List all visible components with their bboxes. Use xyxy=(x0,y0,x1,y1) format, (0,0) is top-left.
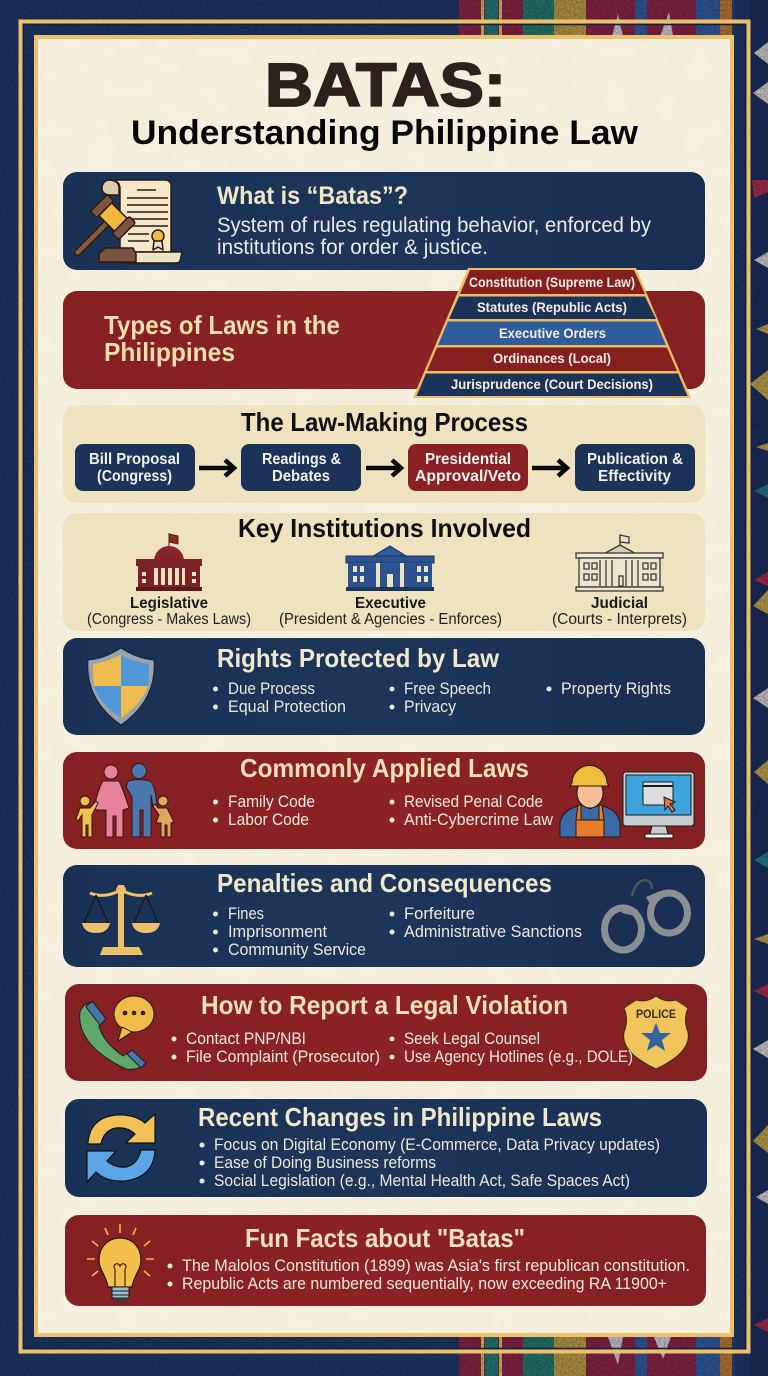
icon: handcuffs xyxy=(604,880,688,950)
pyramid chart: Executive Orders xyxy=(499,325,606,341)
pyramid chart: Jurisprudence (Court Decisions) xyxy=(451,376,653,392)
pyramid chart: Ordinances (Local) xyxy=(493,350,611,366)
icon: police badge: POLICE xyxy=(636,1009,676,1021)
list: Revised Penal Code xyxy=(404,793,543,811)
list: The Malolos Constitution (1899) was Asia's first republican constitution. xyxy=(182,1257,690,1275)
heading xyxy=(104,310,340,367)
arrow xyxy=(199,460,234,476)
heading: What is “Batas”? xyxy=(217,182,408,210)
step: presidential approval xyxy=(408,444,528,491)
list: Free Speech xyxy=(404,680,491,698)
list xyxy=(200,1136,660,1190)
label: executive: (President & Agencies - Enforces) xyxy=(279,611,502,628)
list xyxy=(213,905,582,959)
heading: Commonly Applied Laws xyxy=(240,753,529,783)
heading: Recent Changes in Philippine Laws xyxy=(198,1102,602,1132)
list: Imprisonment xyxy=(228,923,327,941)
heading: The Law-Making Process xyxy=(241,407,528,437)
step: readings and debates: Debates xyxy=(272,468,330,485)
heading: Key Institutions Involved xyxy=(238,513,531,543)
icon: family xyxy=(76,764,174,837)
list: File Complaint (Prosecutor) xyxy=(186,1048,380,1066)
icon: computer xyxy=(623,772,694,838)
description: System of rules regulating behavior, enforced by xyxy=(217,213,651,237)
icon: shield xyxy=(88,648,154,725)
heading: Penalties and Consequences xyxy=(217,868,552,898)
panel: recent changes xyxy=(65,1099,707,1197)
step: bill proposal: (Congress) xyxy=(97,468,172,485)
step: bill proposal xyxy=(75,444,195,491)
list: Seek Legal Counsel xyxy=(404,1030,540,1048)
list: Family Code xyxy=(228,793,315,811)
title xyxy=(131,51,639,152)
panel: how to report xyxy=(65,984,707,1081)
pyramid chart xyxy=(413,268,691,398)
description xyxy=(217,213,651,259)
step: readings and debates xyxy=(241,444,361,491)
list: Property Rights xyxy=(561,680,671,698)
pyramid chart: Statutes (Republic Acts) xyxy=(477,299,627,315)
list: Privacy xyxy=(404,698,457,716)
description: institutions for order & justice. xyxy=(217,235,488,259)
list: Anti-Cybercrime Law xyxy=(404,811,553,829)
list: Republic Acts are numbered sequentially, now exceeding RA 11900+ xyxy=(182,1275,667,1293)
list: Ease of Doing Business reforms xyxy=(214,1154,436,1172)
panel: key institutions xyxy=(63,513,705,631)
heading: Philippines xyxy=(104,337,235,367)
panel: types of laws xyxy=(63,268,705,398)
panel: law-making process xyxy=(63,405,705,503)
list xyxy=(213,793,553,829)
step: publication: Publication & xyxy=(587,451,683,468)
list xyxy=(213,680,671,716)
icon: light bulb xyxy=(87,1224,154,1302)
list: Equal Protection xyxy=(228,698,346,716)
panel: rights protected xyxy=(63,638,705,735)
list: Community Service xyxy=(228,941,366,959)
icon: legislative building xyxy=(136,533,202,591)
list xyxy=(168,1257,690,1293)
list: Due Process xyxy=(228,680,315,698)
icon: executive building xyxy=(346,546,434,591)
panel: penalties xyxy=(63,865,705,967)
step: presidential approval: Approval/Veto xyxy=(415,468,521,485)
list: Forfeiture xyxy=(404,905,475,923)
pyramid chart: Constitution (Supreme Law) xyxy=(469,274,635,290)
step: publication xyxy=(575,444,695,491)
step: publication: Effectivity xyxy=(598,468,671,485)
label: judicial xyxy=(552,595,687,628)
icon: refresh arrows xyxy=(87,1114,155,1182)
label: legislative: (Congress - Makes Laws) xyxy=(87,611,251,628)
label: legislative: Legislative xyxy=(130,595,208,612)
icon: police badge xyxy=(624,996,688,1069)
panel: what is batas xyxy=(61,172,705,270)
label: legislative xyxy=(87,595,251,628)
icon: phone and chat bubble xyxy=(80,996,154,1069)
icon: judicial building xyxy=(576,535,663,591)
icon: scroll and gavel xyxy=(61,180,182,269)
icon: worker xyxy=(560,766,620,837)
label: judicial: Judicial xyxy=(591,595,648,612)
step: readings and debates: Readings & xyxy=(262,451,341,468)
label: executive xyxy=(279,595,502,628)
title: BATAS: xyxy=(265,51,506,119)
heading: Fun Facts about "Batas" xyxy=(245,1223,525,1253)
list: Contact PNP/NBI xyxy=(186,1030,306,1048)
heading: How to Report a Legal Violation xyxy=(201,990,568,1020)
list: Focus on Digital Economy (E-Commerce, Data Privacy updates) xyxy=(214,1136,660,1154)
arrow xyxy=(366,460,401,476)
list: Fines xyxy=(228,905,264,923)
title: Understanding Philippine Law xyxy=(131,114,639,152)
panel: commonly applied laws xyxy=(63,752,705,849)
icon: scales xyxy=(82,885,160,955)
list xyxy=(172,1030,633,1066)
arrow xyxy=(532,460,567,476)
panel: fun facts xyxy=(65,1215,706,1306)
list: Use Agency Hotlines (e.g., DOLE) xyxy=(404,1048,633,1066)
heading: Types of Laws in the xyxy=(104,310,340,340)
label: executive: Executive xyxy=(355,595,426,612)
label: judicial: (Courts - Interprets) xyxy=(552,611,687,628)
list: Administrative Sanctions xyxy=(404,923,582,941)
list: Labor Code xyxy=(228,811,309,829)
step: bill proposal: Bill Proposal xyxy=(89,451,180,468)
list: Social Legislation (e.g., Mental Health Act, Safe Spaces Act) xyxy=(214,1172,630,1190)
heading: Rights Protected by Law xyxy=(217,643,500,673)
step: presidential approval: Presidential xyxy=(425,451,511,468)
